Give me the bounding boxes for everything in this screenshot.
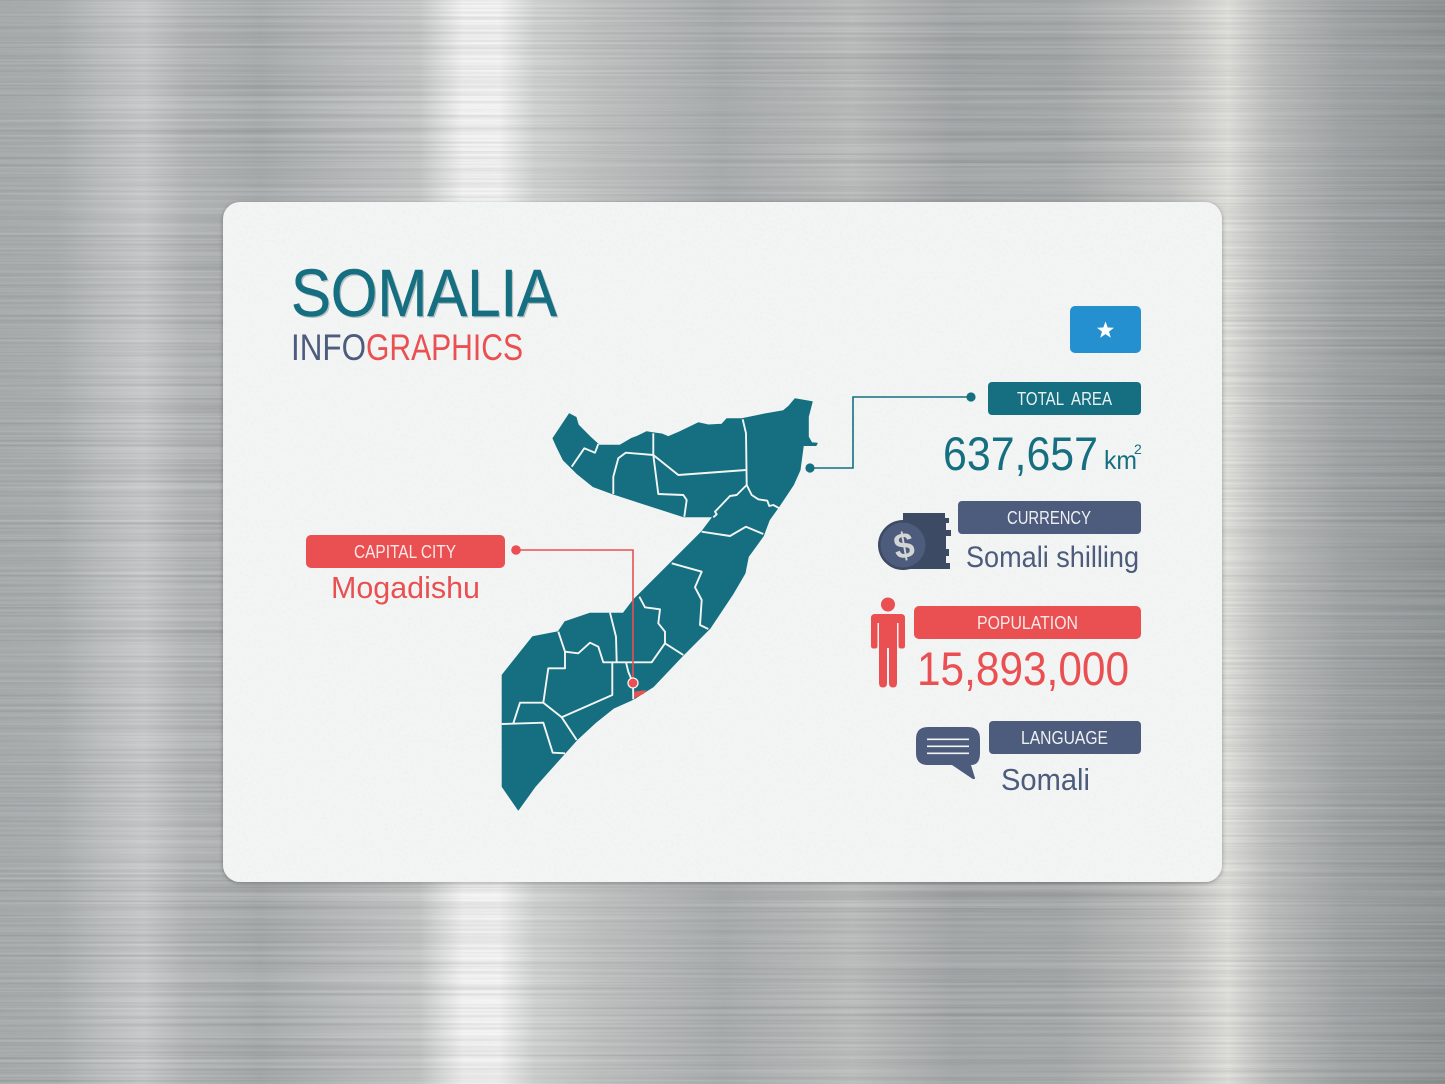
text: Mogadishu: Mogadishu	[331, 570, 480, 605]
icon: Somalia flag	[1070, 306, 1141, 353]
subtitle: INFOGRAPHICS	[291, 327, 523, 368]
icon: coins	[878, 513, 951, 570]
icon: speech bubble	[916, 727, 980, 779]
value: language: Somali	[1001, 762, 1090, 797]
subtitle: INFOGRAPHICS: GRAPHICS	[366, 327, 523, 368]
callout: total area connector	[805, 392, 976, 473]
label: language: LANGUAGE	[1021, 728, 1108, 748]
value: total area: 2	[1134, 441, 1142, 457]
title: SOMALIA: SOMALIA	[292, 258, 559, 332]
callout: capital city connector	[511, 545, 638, 688]
icon: person	[871, 598, 905, 688]
label: population	[914, 606, 1141, 639]
icon: coins: $	[890, 524, 917, 567]
label: total area	[988, 382, 1141, 415]
subtitle: INFOGRAPHICS: INFO	[291, 327, 366, 368]
label: currency	[958, 501, 1141, 534]
map of Somalia	[502, 399, 817, 810]
value: currency: Somali shilling	[966, 541, 1139, 574]
callout: capital city label: CAPITAL CITY	[354, 542, 456, 562]
label: currency: CURRENCY	[1007, 508, 1091, 528]
label: population: POPULATION	[977, 613, 1078, 633]
capital region highlight	[634, 690, 647, 698]
value: total area: 637,657	[943, 427, 1098, 480]
label: total area: TOTAL AREA	[1017, 389, 1112, 409]
value: population: 15,893,000	[917, 642, 1129, 695]
value: total area: km	[1104, 445, 1137, 475]
label: language	[989, 721, 1141, 754]
panel: infographic card	[223, 202, 1222, 882]
callout: capital city label	[306, 535, 505, 568]
title: SOMALIA: SOMALIA	[291, 256, 557, 331]
map region borders	[502, 419, 779, 753]
